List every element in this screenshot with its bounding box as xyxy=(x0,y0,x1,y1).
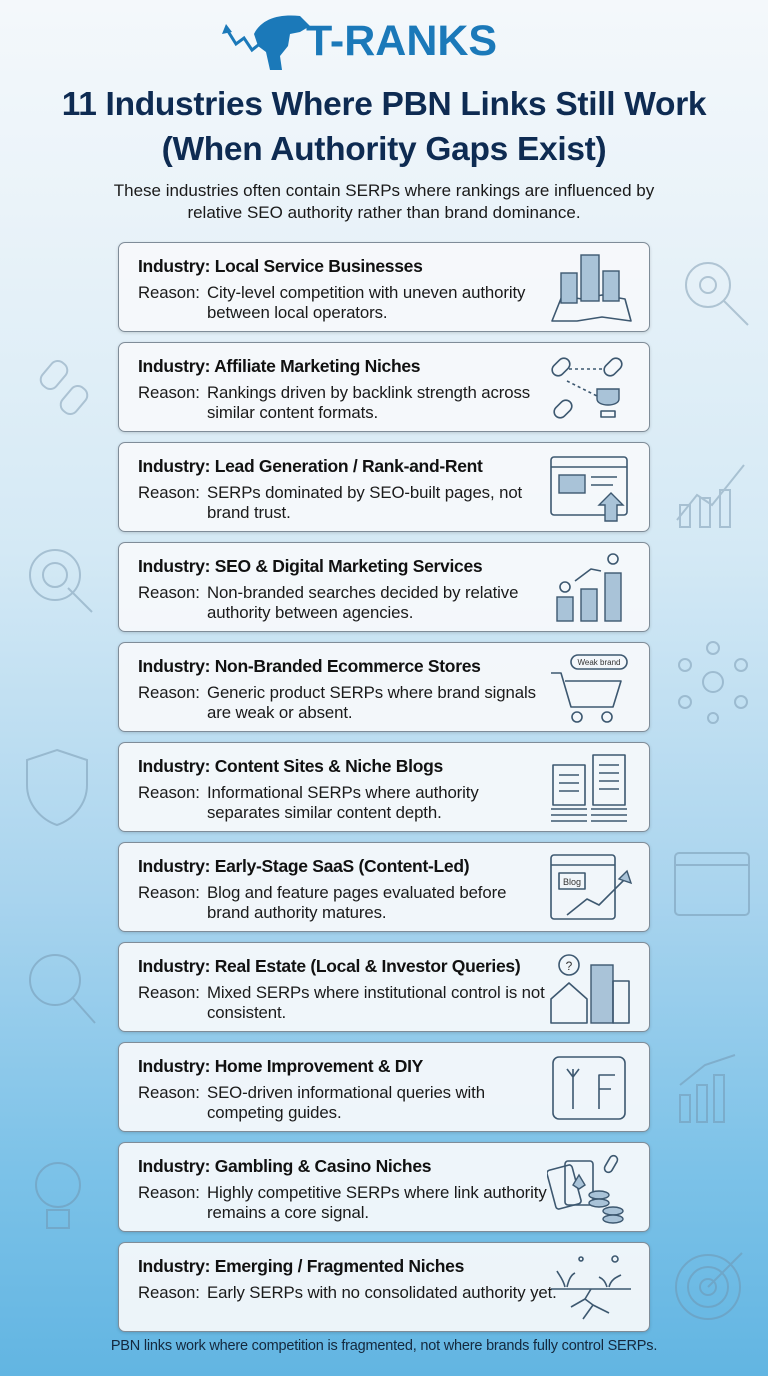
subtitle: These industries often contain SERPs where rankings are influenced by xyxy=(114,181,654,200)
card 6: Reason: xyxy=(138,783,200,802)
icon: document stacks xyxy=(551,754,627,822)
logo text: T-RANKS xyxy=(306,17,497,65)
card 8: Reason: xyxy=(138,983,200,1002)
card 5 xyxy=(118,642,650,732)
icon: bar chart people xyxy=(556,553,622,622)
card 4: authority between agencies. xyxy=(207,603,413,622)
card 10: remains a core signal. xyxy=(207,1203,369,1222)
card 11: Reason: xyxy=(138,1283,200,1302)
card 10: Reason: xyxy=(138,1183,200,1202)
card 2: Rankings driven by backlink strength across xyxy=(207,383,530,402)
card 4: Reason: xyxy=(138,583,200,602)
icon: cards and chips xyxy=(547,1154,624,1224)
card 3 xyxy=(118,442,650,532)
card 5: Generic product SERPs where brand signals xyxy=(207,683,536,702)
card 8: Mixed SERPs where institutional control is not xyxy=(207,983,545,1002)
icon: blog window with arrow xyxy=(550,854,632,920)
card 3: Industry: Lead Generation / Rank-and-Rent xyxy=(138,456,483,476)
card 1: Industry: Local Service Businesses xyxy=(138,256,423,276)
card 3: SERPs dominated by SEO-built pages, not xyxy=(207,483,522,502)
logo xyxy=(222,16,497,70)
card 9: Reason: xyxy=(138,1083,200,1102)
card 4: Industry: SEO & Digital Marketing Services xyxy=(138,556,482,576)
card 5: Reason: xyxy=(138,683,200,702)
card 5: are weak or absent. xyxy=(207,703,352,722)
card 3: brand trust. xyxy=(207,503,291,522)
card 2 xyxy=(118,342,650,432)
icon: webpage with arrow xyxy=(550,456,628,522)
card 1: City-level competition with uneven authority xyxy=(207,283,525,302)
card 6: Industry: Content Sites & Niche Blogs xyxy=(138,756,443,776)
card 1: Reason: xyxy=(138,283,200,302)
card 7 xyxy=(118,842,650,932)
card 1 xyxy=(118,242,650,332)
subtitle xyxy=(114,181,654,222)
card 7: Reason: xyxy=(138,883,200,902)
card 5: Industry: Non-Branded Ecommerce Stores xyxy=(138,656,481,676)
card 9: Industry: Home Improvement & DIY xyxy=(138,1056,423,1076)
card 6: separates similar content depth. xyxy=(207,803,442,822)
card 9: competing guides. xyxy=(207,1103,342,1122)
title: 11 Industries Where PBN Links Still Work xyxy=(62,86,706,123)
card 8 xyxy=(118,942,650,1032)
card 2: similar content formats. xyxy=(207,403,378,422)
icon: house and buildings xyxy=(550,954,630,1024)
icon: city map xyxy=(551,254,632,322)
card 10: Industry: Gambling & Casino Niches xyxy=(138,1156,431,1176)
card 7: brand authority matures. xyxy=(207,903,386,922)
icon: links and trophy xyxy=(551,357,623,419)
card 11 xyxy=(118,1242,650,1332)
card 8: Industry: Real Estate (Local & Investor Queries) xyxy=(138,956,520,976)
card 7: Industry: Early-Stage SaaS (Content-Led) xyxy=(138,856,469,876)
card 9: SEO-driven informational queries with xyxy=(207,1083,485,1102)
icon: blueprint with tools xyxy=(552,1056,626,1120)
icon: dino with arrow xyxy=(222,16,310,70)
card 6: Informational SERPs where authority xyxy=(207,783,479,802)
card 8: consistent. xyxy=(207,1003,286,1022)
icon: cracked ground with sprouts xyxy=(551,1255,631,1320)
card 11: Industry: Emerging / Fragmented Niches xyxy=(138,1256,464,1276)
card 2: Reason: xyxy=(138,383,200,402)
card 2: Industry: Affiliate Marketing Niches xyxy=(138,356,420,376)
icon: blog window with arrow: Blog xyxy=(563,877,581,887)
card 4 xyxy=(118,542,650,632)
card 4: Non-branded searches decided by relative xyxy=(207,583,518,602)
icon: cart with tag xyxy=(551,654,628,723)
card 6 xyxy=(118,742,650,832)
title: (When Authority Gaps Exist) xyxy=(162,131,606,168)
card 11: Early SERPs with no consolidated authority yet. xyxy=(207,1283,557,1302)
icon: cart with tag: Weak brand xyxy=(578,658,620,667)
card 7: Blog and feature pages evaluated before xyxy=(207,883,506,902)
title xyxy=(62,86,706,168)
card 3: Reason: xyxy=(138,483,200,502)
footer note: PBN links work where competition is fragmented, not where brands fully control SERPs. xyxy=(111,1338,657,1354)
icon: house and buildings: ? xyxy=(566,959,573,973)
card 10: Highly competitive SERPs where link authority xyxy=(207,1183,547,1202)
card 9 xyxy=(118,1042,650,1132)
card 1: between local operators. xyxy=(207,303,387,322)
subtitle: relative SEO authority rather than brand dominance. xyxy=(187,203,581,222)
card 10 xyxy=(118,1142,650,1232)
